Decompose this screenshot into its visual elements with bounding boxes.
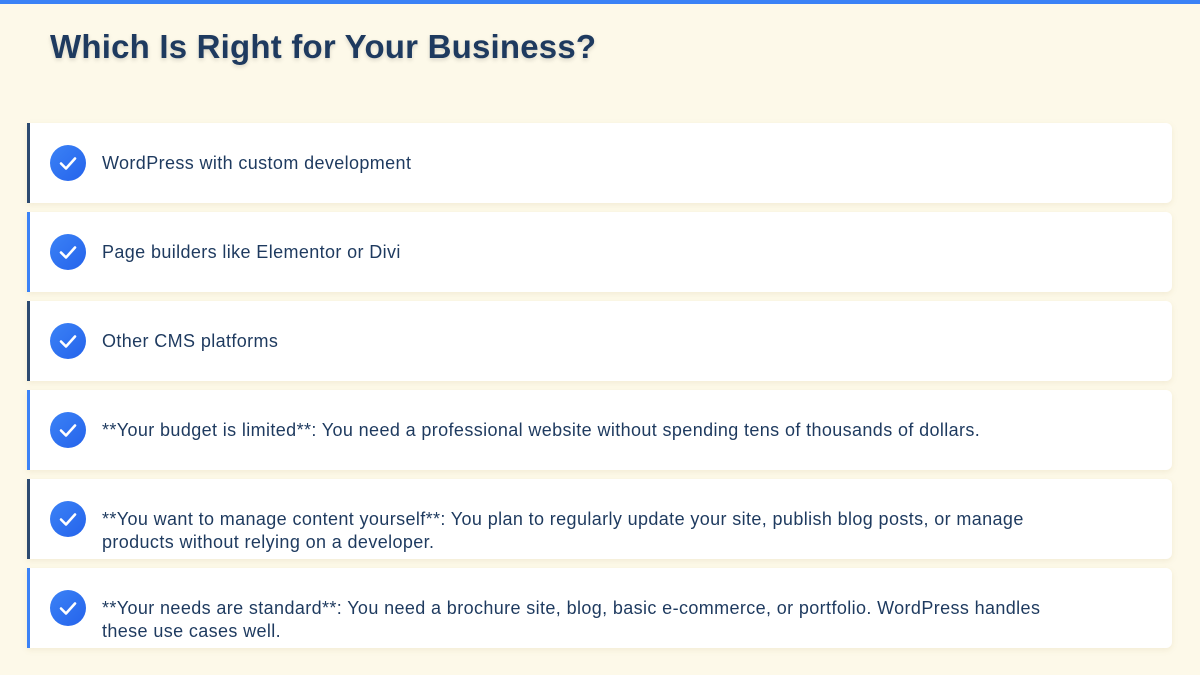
card 4: [27, 390, 1172, 470]
text: [102, 509, 1024, 552]
icon: check: [50, 323, 86, 359]
icon: check: [50, 234, 86, 270]
text: products without relying on a developer.: [102, 532, 434, 552]
card 2: [27, 212, 1172, 292]
text: **You want to manage content yourself**: You plan to regularly update your site, publish blog posts, or manage: [102, 509, 1024, 529]
title: Which Is Right for Your Business?: [50, 28, 596, 65]
card 1: [27, 123, 1172, 203]
text: these use cases well.: [102, 621, 281, 641]
icon: check: [50, 412, 86, 448]
text: [102, 598, 1040, 641]
card 5: [27, 479, 1172, 559]
card 3: [27, 301, 1172, 381]
icon: check: [50, 145, 86, 181]
icon: check: [50, 590, 86, 626]
text: Other CMS platforms: [102, 331, 278, 351]
text: **Your budget is limited**: You need a professional website without spending tens of thousands of dollars.: [102, 420, 980, 440]
text: Page builders like Elementor or Divi: [102, 242, 401, 262]
text: WordPress with custom development: [102, 153, 411, 173]
text: **Your needs are standard**: You need a brochure site, blog, basic e-commerce, or portfolio. WordPress handles: [102, 598, 1040, 618]
card 6: [27, 568, 1172, 648]
icon: check: [50, 501, 86, 537]
